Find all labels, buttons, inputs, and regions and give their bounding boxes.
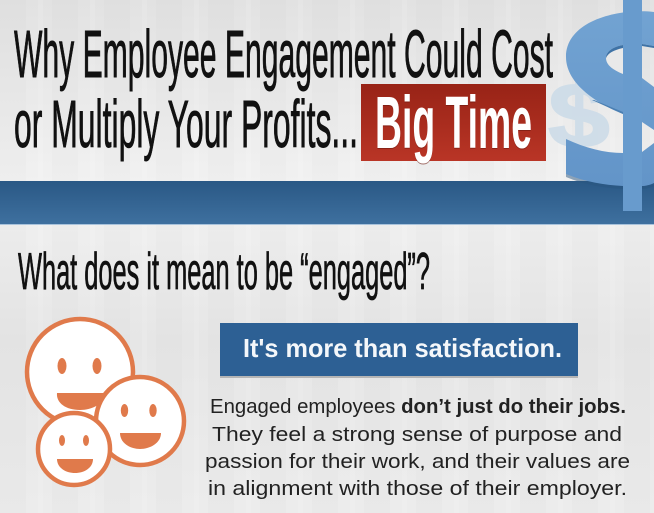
body text: They feel a strong sense of purpose and	[212, 423, 622, 446]
callout: more than satisfaction: It's more than satisfaction.	[243, 333, 562, 363]
header band	[0, 181, 654, 225]
body text: in alignment with those of their employer.	[208, 477, 627, 500]
callout: more than satisfaction	[220, 323, 578, 378]
small face	[38, 413, 110, 485]
body text: Engaged employees don’t just do their jobs.	[210, 395, 626, 418]
title	[14, 17, 553, 162]
icon: smiling faces	[27, 319, 184, 485]
medium face	[96, 377, 184, 465]
large face	[27, 319, 133, 425]
highlighted title words: Big Time	[361, 81, 546, 165]
faded small dollar sign: $	[548, 64, 610, 167]
body text: passion for their work, and their values are	[205, 450, 630, 473]
body text	[205, 395, 630, 500]
icon: large dollar sign	[566, 0, 654, 211]
